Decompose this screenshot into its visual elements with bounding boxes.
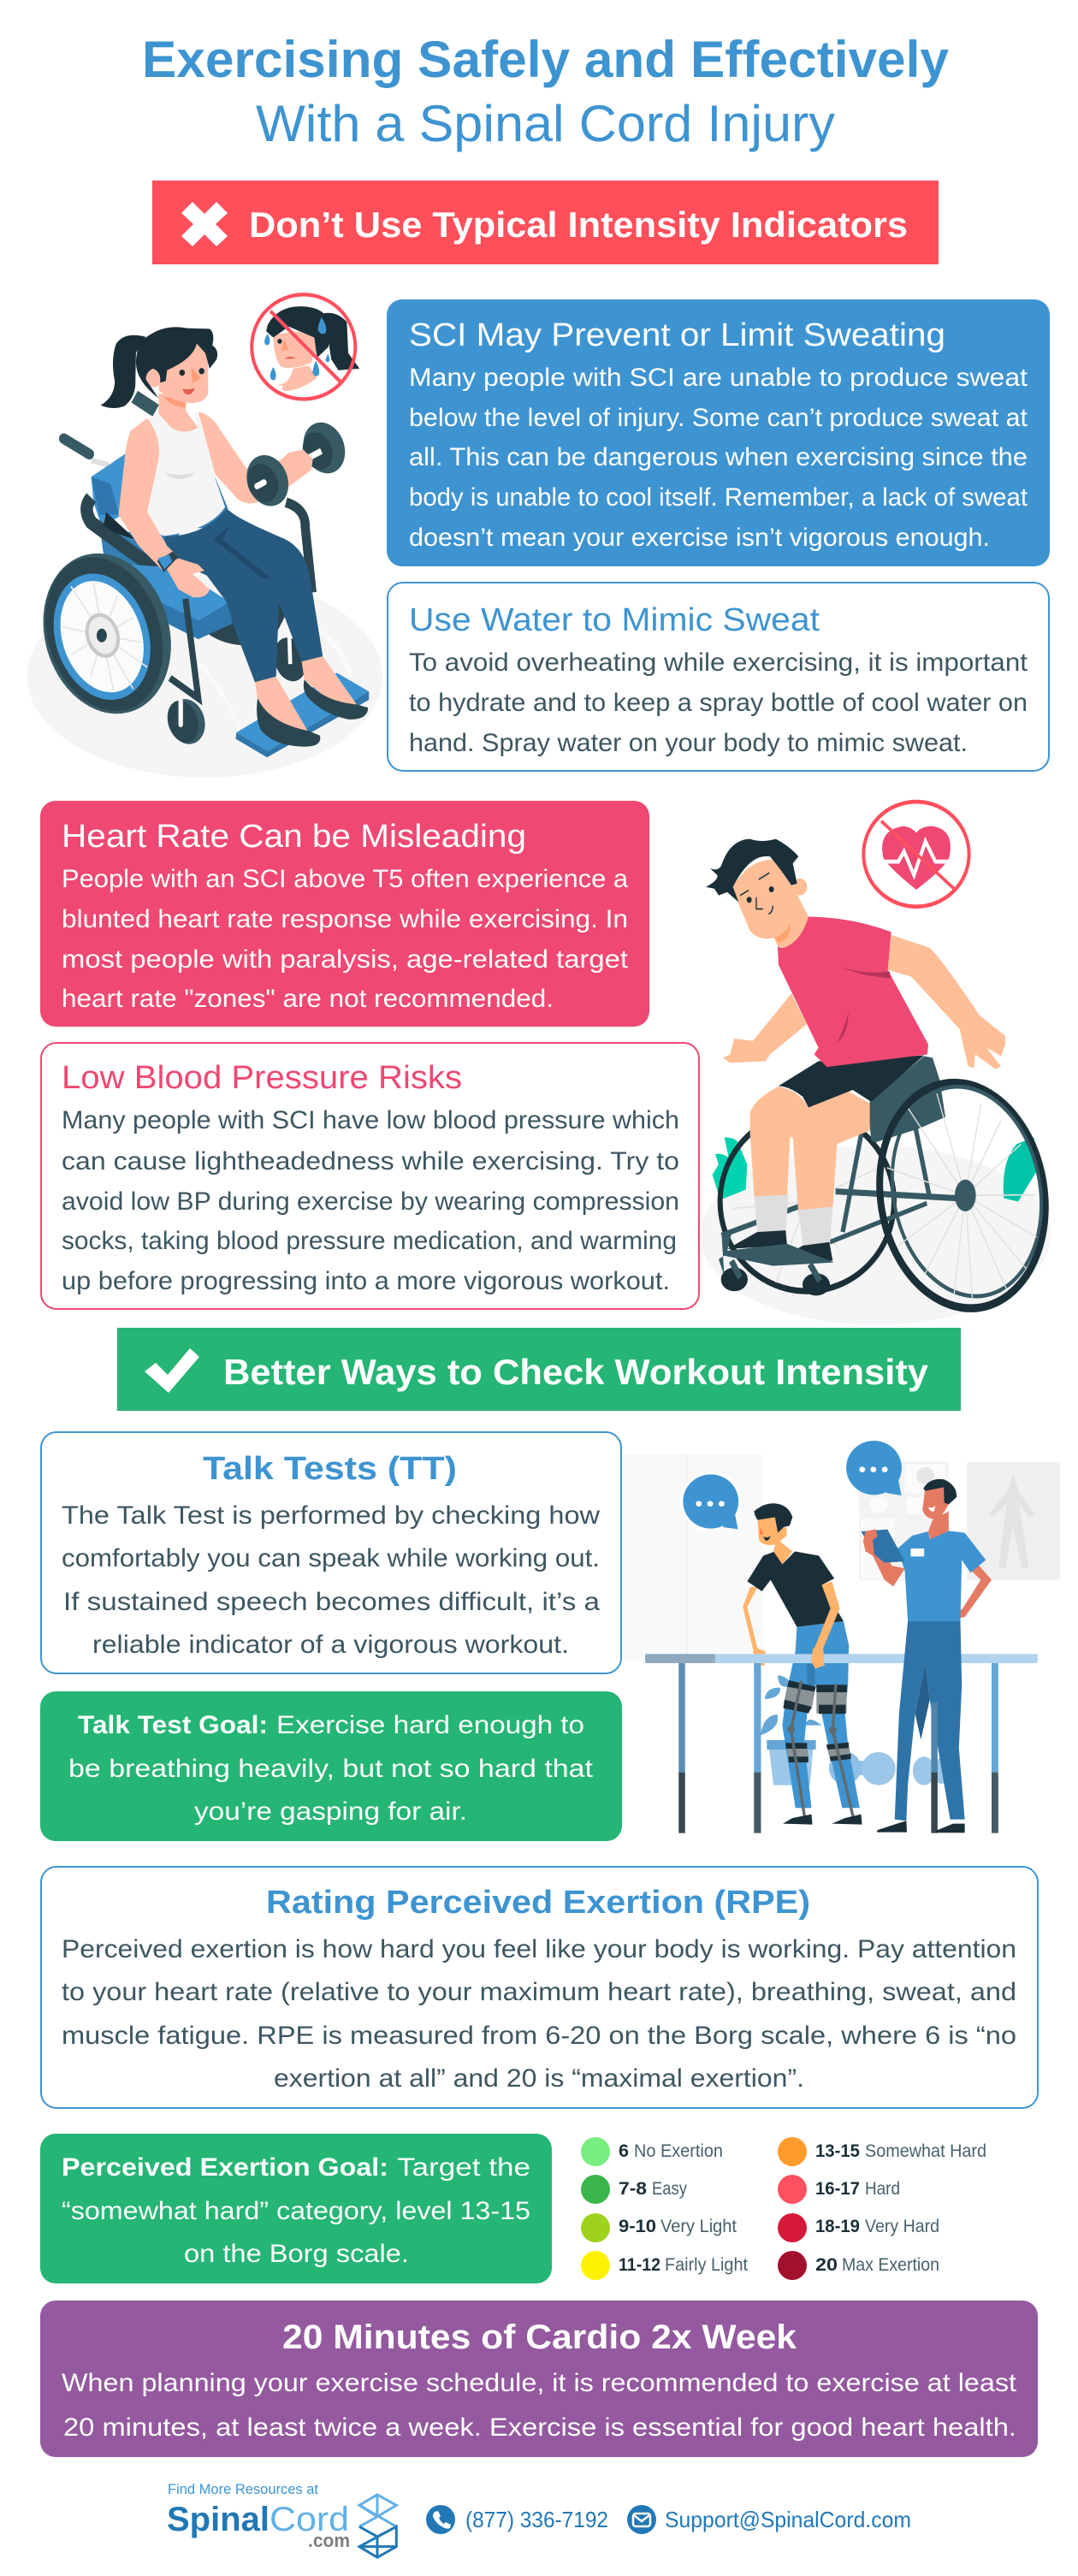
torso (147, 411, 225, 536)
footplate (236, 672, 369, 751)
panel: 20 minutes of cardio: 20 minutes, at least twice a week. Exercise is essential for good heart health. (63, 2413, 1016, 2442)
banner: don't use typical intensity indicators (152, 181, 939, 264)
table bar (645, 1649, 1038, 1833)
legend: Borg scale: 16-17 (815, 2179, 860, 2199)
panel: heart rate can be misleading (40, 801, 649, 1027)
panel: heart rate can be misleading: blunted heart rate response while exercising. In (62, 905, 628, 933)
panel: low blood pressure risks: up before progressing into a more vigorous workout. (62, 1267, 670, 1295)
panel: rating perceived exertion: to your heart rate (relative to your maximum heart rate), breathing, sweat, and (62, 1978, 1016, 2006)
panel: low blood pressure risks (41, 1043, 699, 1309)
icon: no heart rate (863, 802, 969, 907)
icon: logo mark (359, 2495, 396, 2557)
panel: rating perceived exertion: muscle fatigue. RPE is measured from 6-20 on the Borg scale, where 6 is “no (62, 2022, 1016, 2050)
panel: low blood pressure risks: Low Blood Pressure Risks (62, 1060, 462, 1096)
big wheel (856, 1057, 1069, 1334)
panel: SCI may prevent or limit sweating: Many people with SCI are unable to produce sweat (409, 364, 1028, 392)
panel: rating perceived exertion: exertion at all” and 20 is “maximal exertion”. (274, 2064, 804, 2093)
banner: better ways to check workout intensity: Better Ways to Check Workout Intensity (223, 1352, 929, 1392)
callout: talk test goal: be breathing heavily, but not so hard that (68, 1755, 594, 1783)
illustration: woman in wheelchair with dumbbell (21, 294, 382, 778)
banner: don't use typical intensity indicators: Don’t Use Typical Intensity Indicators (249, 204, 908, 245)
patient (743, 1503, 862, 1833)
legend: Borg scale: Very Hard (865, 2217, 939, 2236)
legend: Borg scale: 20 (815, 2255, 838, 2275)
legend: Borg scale: 7-8 (619, 2179, 647, 2199)
panel: heart rate can be misleading: heart rate "zones" are not recommended. (62, 985, 554, 1013)
legs (255, 677, 309, 732)
footer: logo: Spinal (167, 2501, 270, 2538)
panel: rating perceived exertion: Rating Perceived Exertion (RPE) (266, 1885, 810, 1921)
icon: x mark (181, 202, 228, 246)
legend: Borg scale: Easy (652, 2179, 687, 2199)
panel: use water to mimic sweat: to hydrate and to keep a spray bottle of cool water on (409, 689, 1028, 717)
legend: Borg scale: Fairly Light (665, 2255, 748, 2275)
panel: talk tests: If sustained speech becomes difficult, it’s a (63, 1588, 600, 1616)
callout: talk test goal: you’re gasping for air. (194, 1797, 467, 1826)
illustration: man in sports wheelchair (700, 802, 1069, 1334)
footer: logo: .com (308, 2530, 350, 2551)
title (142, 31, 950, 152)
panel: heart rate can be misleading: most people with paralysis, age-related target (62, 945, 629, 974)
footer: logo: Cord (270, 2501, 349, 2538)
head (158, 394, 198, 431)
legend: Borg scale: 18-19 (815, 2217, 860, 2236)
wheel (21, 530, 193, 737)
legend: Borg scale: 9-10 (619, 2217, 656, 2236)
panel: 20 minutes of cardio (40, 2301, 1038, 2457)
title: With a Spinal Cord Injury (256, 95, 835, 152)
legend: Borg scale: Somewhat Hard (865, 2141, 986, 2161)
panel: heart rate can be misleading: Heart Rate Can be Misleading (62, 819, 526, 855)
panel: low blood pressure risks: can cause lightheadedness while exercising. Try to (62, 1147, 679, 1175)
legend: Borg scale: No Exertion (634, 2141, 723, 2161)
icon: no sweating (252, 294, 359, 399)
illustration: physical therapy clinic (623, 1441, 1060, 1833)
panel: low blood pressure risks: avoid low BP during exercise by wearing compression (62, 1187, 679, 1216)
speech bubble: patient (680, 1472, 742, 1531)
therapist (861, 1479, 992, 1833)
callout: talk test goal: Exercise hard enough to (276, 1711, 584, 1739)
panel: use water to mimic sweat: To avoid overheating while exercising, it is important (409, 648, 1028, 677)
head (793, 879, 807, 896)
legend: Borg scale (581, 2137, 986, 2280)
panel: 20 minutes of cardio: 20 Minutes of Cardio 2x Week (282, 2318, 797, 2356)
panel: use water to mimic sweat (388, 583, 1049, 771)
plant and dumbbell (761, 1675, 821, 1735)
footer: email: Support@SpinalCord.com (665, 2507, 911, 2532)
panel: low blood pressure risks: socks, taking blood pressure medication, and warming (62, 1227, 677, 1255)
callout: perceived exertion goal: Target the (397, 2153, 530, 2182)
panel: talk tests: comfortably you can speak while working out. (62, 1544, 600, 1572)
legend: Borg scale: 13-15 (815, 2141, 860, 2161)
dumbbell (295, 414, 353, 482)
legend: Borg scale: 6 (619, 2141, 629, 2161)
footer: logo (167, 2481, 396, 2557)
legend: Borg scale: 11-12 (619, 2255, 660, 2275)
callout: perceived exertion goal: “somewhat hard” category, level 13-15 (62, 2197, 530, 2225)
panel: talk tests: The Talk Test is performed by checking how (62, 1501, 600, 1530)
legend: Borg scale: Max Exertion (842, 2255, 939, 2275)
panel: SCI may prevent or limit sweating: SCI May Prevent or Limit Sweating (409, 317, 945, 353)
icon: check mark (145, 1348, 199, 1393)
panel: rating perceived exertion: Perceived exertion is how hard you feel like your body is working. Pay attention (62, 1935, 1016, 1963)
panel: rating perceived exertion (41, 1867, 1038, 2108)
callout: perceived exertion goal: Perceived Exertion Goal: (62, 2153, 388, 2182)
panel: use water to mimic sweat: Use Water to Mimic Sweat (409, 602, 820, 638)
panel: heart rate can be misleading: People with an SCI above T5 often experience a (62, 865, 628, 893)
callout: perceived exertion goal (40, 2134, 552, 2283)
footer: logo: Find More Resources at (168, 2481, 318, 2497)
table rear legs (678, 1663, 998, 1833)
legend: Borg scale: Very Light (660, 2217, 737, 2236)
panel: SCI may prevent or limit sweating: doesn’t mean your exercise isn’t vigorous enough. (409, 524, 990, 552)
footer: phone: (877) 336-7192 (465, 2507, 608, 2532)
title: Exercising Safely and Effectively (142, 31, 950, 88)
callout: perceived exertion goal: on the Borg scale. (184, 2240, 409, 2268)
frame (170, 599, 198, 698)
callout: talk test goal (40, 1691, 622, 1841)
arms (723, 993, 807, 1063)
speech bubble: therapist (846, 1441, 902, 1495)
shirt (778, 917, 928, 1067)
panel: SCI may prevent or limit sweating: body is unable to cool itself. Remember, a lack of sweat (409, 483, 1028, 512)
footer: phone (426, 2505, 608, 2534)
panel: SCI may prevent or limit sweating: all. This can be dangerous when exercising since the (409, 443, 1028, 471)
panel: talk tests (41, 1432, 621, 1673)
panel: talk tests: Talk Tests (TT) (203, 1451, 457, 1487)
callout: talk test goal: Talk Test Goal: (78, 1711, 268, 1739)
banner: better ways to check workout intensity (117, 1328, 961, 1411)
legend: Borg scale: Hard (865, 2179, 900, 2199)
panel: 20 minutes of cardio: When planning your exercise schedule, it is recommended to exercise at least (62, 2369, 1017, 2397)
panel: use water to mimic sweat: hand. Spray water on your body to mimic sweat. (409, 729, 968, 757)
panel: SCI may prevent or limit sweating (387, 299, 1050, 566)
panel: low blood pressure risks: Many people with SCI have low blood pressure which (62, 1106, 679, 1134)
legs (750, 1087, 870, 1215)
panel: SCI may prevent or limit sweating: below the level of injury. Some can’t produce sweat at (409, 404, 1028, 432)
panel: talk tests: reliable indicator of a vigorous workout. (92, 1631, 569, 1659)
